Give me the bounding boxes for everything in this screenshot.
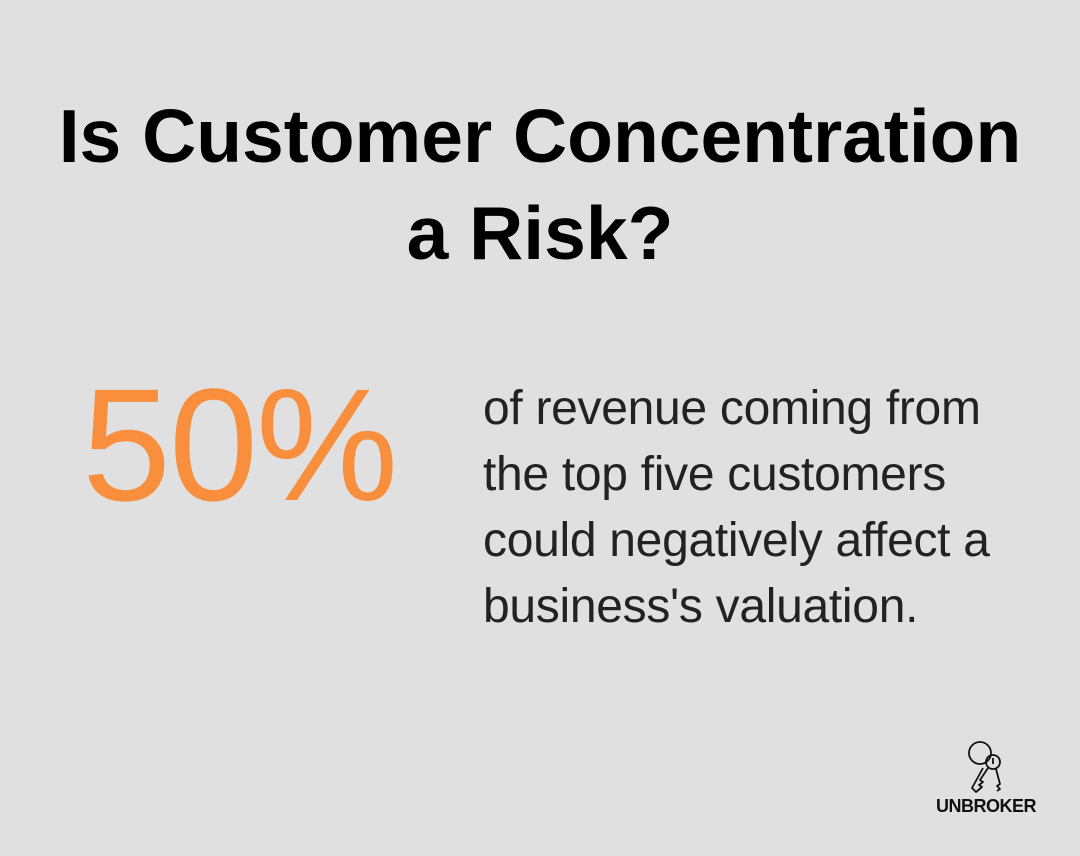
icon: keys: [969, 742, 1000, 792]
stat description: [483, 382, 990, 633]
title: a Risk?: [407, 191, 673, 275]
stat description: the top five customers: [483, 448, 946, 501]
stat description: of revenue coming from: [483, 382, 981, 435]
stat description: business's valuation.: [483, 580, 918, 633]
logo: unbroker: UNBROKER: [936, 796, 1036, 816]
stat number: 50%: [82, 355, 396, 534]
stat description: could negatively affect a: [483, 514, 990, 567]
title: Is Customer Concentration: [59, 94, 1021, 178]
logo: unbroker: [936, 741, 1036, 816]
title: [59, 94, 1021, 275]
